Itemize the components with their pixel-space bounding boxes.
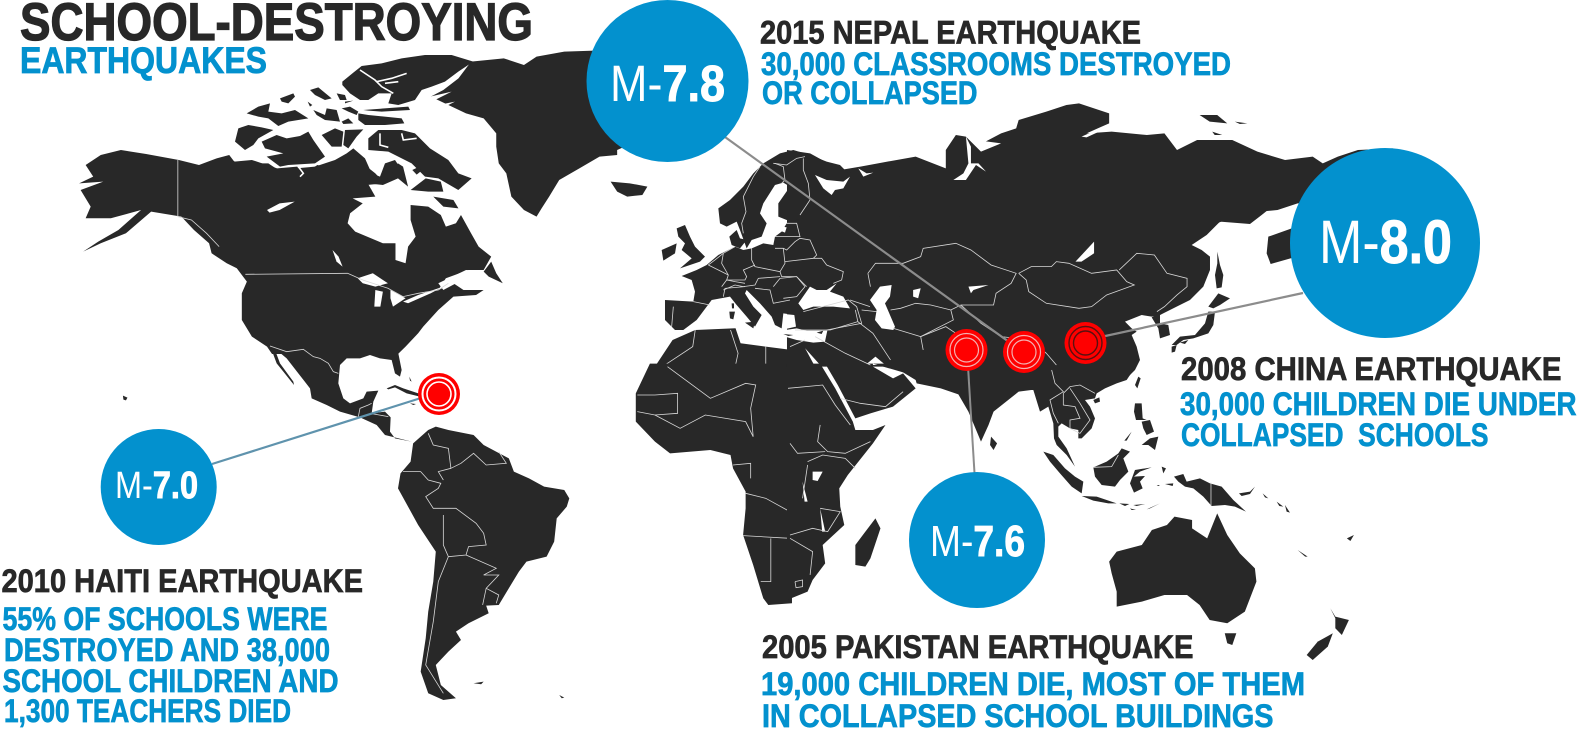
map: North America mainland, Greenland, Iceland [79,51,792,367]
map: Canadian Arctic archipelago [225,55,473,190]
map: Europe [662,150,900,350]
text block: Haiti earthquake: DESTROYED AND 38,000 [4,632,330,668]
magnitude badge: M-7.0 [101,429,217,545]
magnitude badge: M-7.6 [909,472,1045,608]
leader line: Pakistan [967,350,974,473]
text block: Haiti earthquake: 2010 HAITI EARTHQUAKE [2,563,363,599]
map: Southeast Asia and Indonesia [1030,370,1290,513]
map: Asian country borders [790,243,1187,365]
world map [79,51,1393,700]
text block: Nepal earthquake: OR COLLAPSED [762,75,978,111]
map: South America and west Africa [123,364,792,700]
icon: epicentre target Pakistan [946,329,988,371]
title: EARTHQUAKES [20,40,267,81]
magnitude badge: M-7.6: M-7.6 [930,517,1025,566]
magnitude badge: M-8.0: M-8.0 [1319,208,1452,276]
text block: Haiti earthquake [2,563,363,729]
text block: Nepal earthquake: 2015 NEPAL EARTHQUAKE [760,14,1141,50]
leader line: Haiti [212,398,421,464]
leader line: China [1096,293,1303,338]
map: East Asia, Korea and Japan [1100,200,1297,380]
text block: Nepal earthquake [760,14,1231,111]
text block: Pakistan earthquake: 2005 PAKISTAN EARTHQUAKE [762,629,1194,665]
magnitude badge: M-7.0: M-7.0 [115,465,198,507]
map: East Africa, Arabia, South Asia, Australia and New Zealand [787,364,1354,660]
text block: Haiti earthquake: 55% OF SCHOOLS WERE [2,601,328,637]
map: Russia, Central Asia and China [787,103,1393,367]
text block: Haiti earthquake: 1,300 TEACHERS DIED [4,693,291,729]
text block: Nepal earthquake: 30,000 CLASSROOMS DESTROYED [761,46,1231,82]
magnitude badge: M-8.0 [1290,148,1480,338]
magnitude badge: M-7.8 [586,0,748,162]
map: Mexico, Central America, Caribbean [270,330,433,442]
text block: Haiti earthquake: SCHOOL CHILDREN AND [2,663,338,699]
title [20,0,533,81]
text block: China earthquake: COLLAPSED SCHOOLS [1181,417,1488,453]
icon: epicentre target China [1064,322,1106,364]
leader line: Nepal [725,137,1016,347]
icon: epicentre target Nepal [1003,331,1045,373]
text block: Pakistan earthquake [761,629,1305,729]
text block: Pakistan earthquake: 19,000 CHILDREN DIE, MOST OF THEM [761,666,1305,702]
magnitude badge: M-7.8: M-7.8 [610,55,725,112]
icon: epicentre target Haiti [418,373,460,415]
text block: China earthquake [1180,351,1576,453]
